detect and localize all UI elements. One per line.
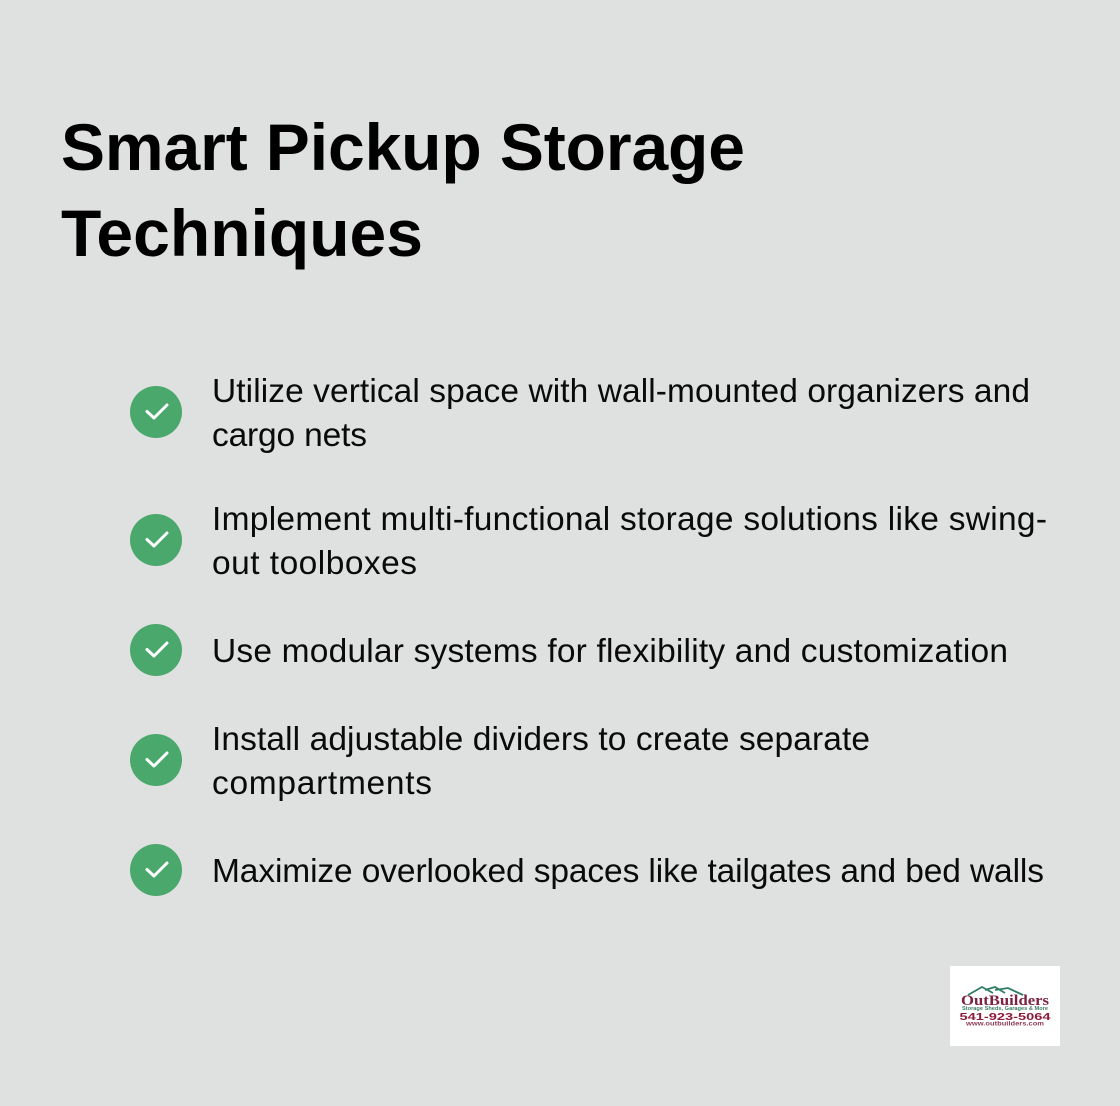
list item 2 bbox=[130, 501, 1047, 582]
list item 4: compartments bbox=[212, 765, 432, 802]
logo: OutBuilders: Storage Sheds, Garages & More bbox=[962, 1006, 1048, 1012]
logo: OutBuilders: 541-923-5064 bbox=[960, 1011, 1051, 1023]
checklist bbox=[130, 373, 1047, 896]
list item 1 bbox=[130, 373, 1030, 454]
list item 1: cargo nets bbox=[212, 417, 367, 454]
title bbox=[61, 110, 745, 270]
list item 4 bbox=[130, 721, 870, 802]
title: Smart Pickup Storage bbox=[61, 110, 745, 184]
logo: OutBuilders: www.outbuilders.com bbox=[965, 1020, 1044, 1028]
list item 2: Implement multi-functional storage solutions like swing- bbox=[212, 501, 1047, 538]
list item 1: Utilize vertical space with wall-mounted organizers and bbox=[212, 373, 1030, 410]
list item 3 bbox=[130, 624, 1008, 676]
list item 2: out toolboxes bbox=[212, 545, 417, 582]
list item 5 bbox=[130, 844, 1044, 896]
title: Techniques bbox=[61, 196, 423, 270]
list item 5: Maximize overlooked spaces like tailgates and bed walls bbox=[212, 853, 1044, 890]
logo: OutBuilders: OutBuilders bbox=[961, 993, 1049, 1009]
list item 3: Use modular systems for flexibility and customization bbox=[212, 633, 1008, 670]
logo: OutBuilders bbox=[950, 966, 1060, 1046]
list item 4: Install adjustable dividers to create separate bbox=[212, 721, 870, 758]
icon: roof lines bbox=[968, 987, 1023, 995]
